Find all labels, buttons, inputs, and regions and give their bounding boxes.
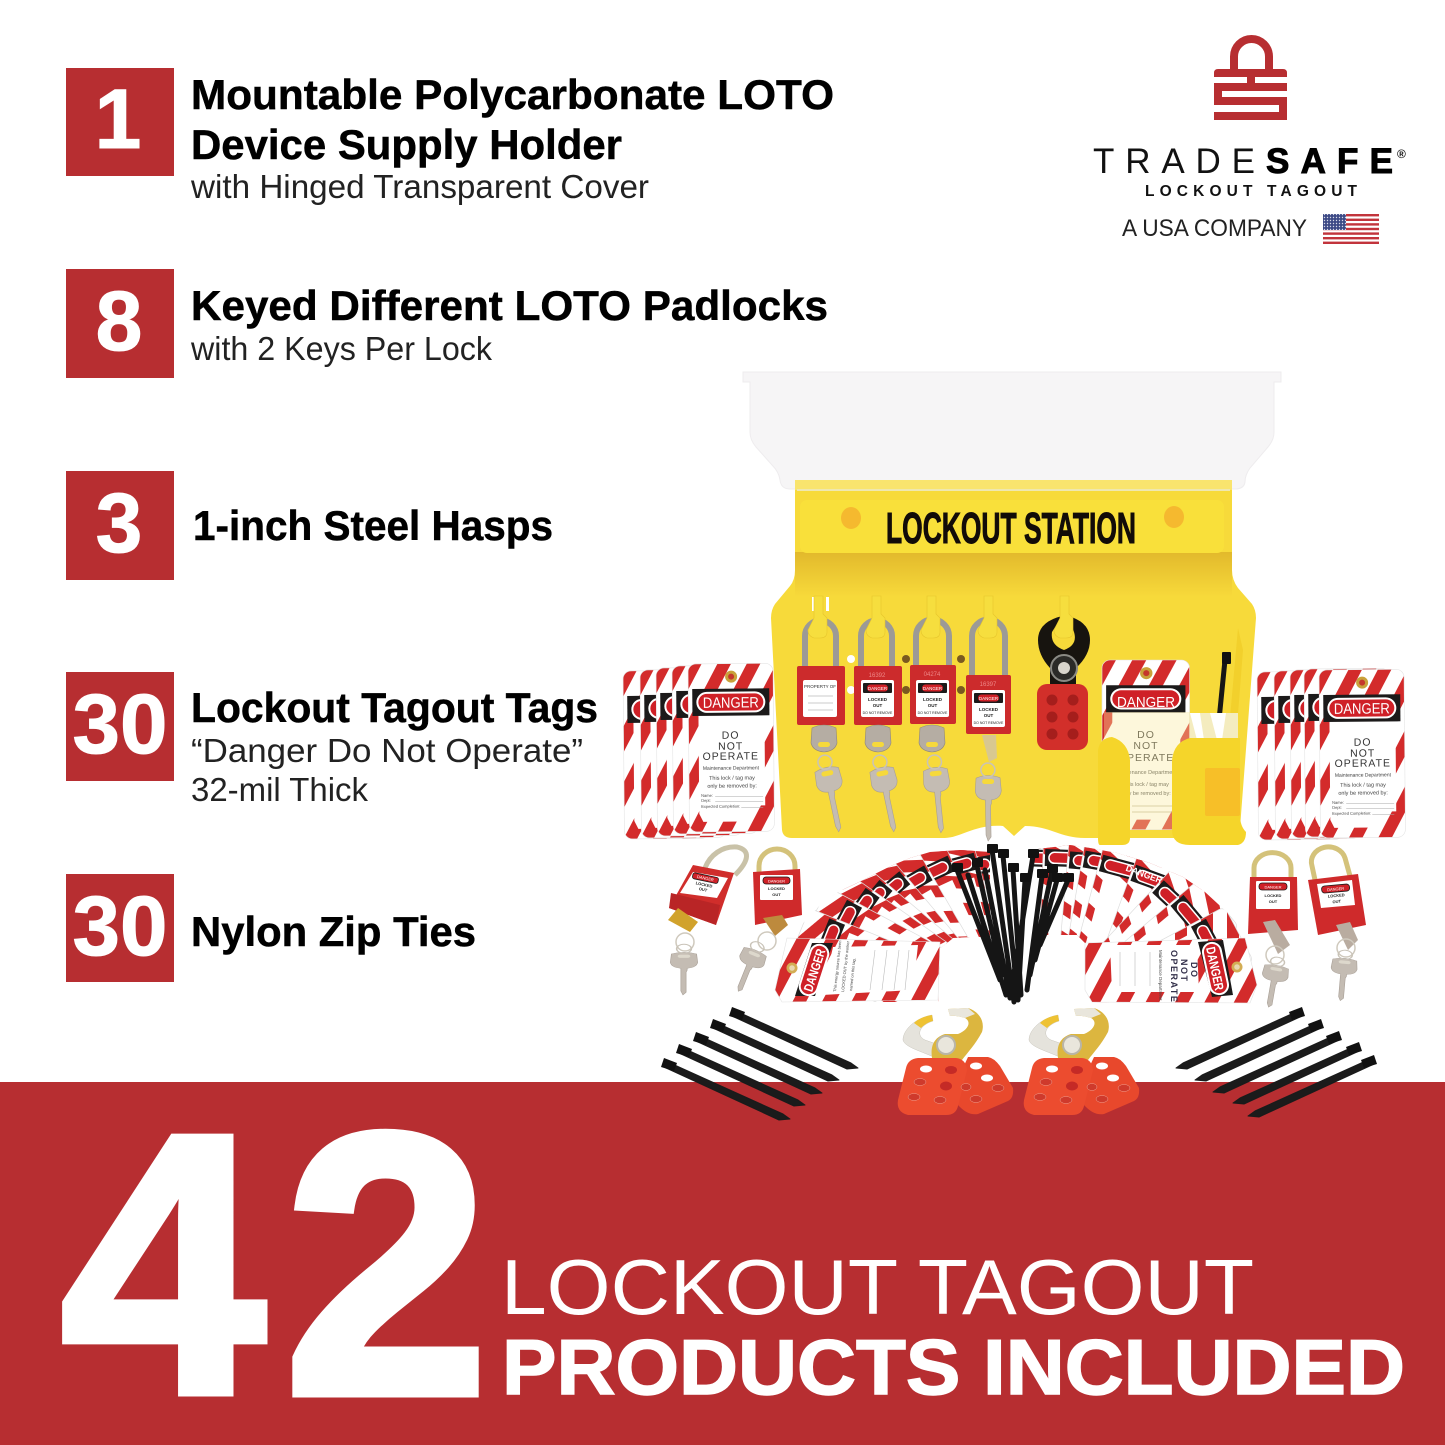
loose padlock left 2 <box>727 849 802 996</box>
front right tag: NOT <box>1179 959 1189 982</box>
icon: padlock logo <box>1214 39 1287 120</box>
nameplate: LOCKOUT STATION <box>886 504 1136 553</box>
loose padlock left 1: LOCKED <box>695 880 713 889</box>
main left tag: OPERATE <box>703 750 759 763</box>
banner line 1: LOCKOUT TAGOUT <box>501 1243 1254 1331</box>
main right tag: OPERATE <box>1335 757 1391 770</box>
transparent cover <box>743 372 1281 489</box>
padlock 4 with keys: 16397 <box>980 682 997 688</box>
right half of fan <box>1030 845 1258 1004</box>
feature 5: zip ties: 30 <box>72 879 168 973</box>
main right tag: Name: <box>1332 800 1344 805</box>
tag in pocket: DO <box>1137 729 1155 741</box>
loose padlock right 1: DANGER <box>1264 884 1282 890</box>
feature 4: tags: “Danger Do Not Operate” <box>191 732 583 769</box>
main left tag: Maintenance Department <box>703 765 760 772</box>
loose padlock left 1 <box>668 847 747 995</box>
padlock 2 with keys: DANGER <box>868 686 888 691</box>
product: lockout station board <box>743 372 1281 845</box>
logo: TradeSafe: ® <box>1397 147 1406 161</box>
logo: TradeSafe <box>1093 39 1406 244</box>
tag in pocket: NOT <box>1133 740 1159 752</box>
main left tag: Name: <box>701 793 713 798</box>
feature 2: padlocks: Keyed Different LOTO Padlocks <box>191 282 828 329</box>
feature 3: hasps: 1-inch Steel Hasps <box>193 502 553 549</box>
main right tag: DO <box>1354 737 1372 749</box>
front left tag: LOCKED OUT by the worker <box>840 940 850 992</box>
main left tag <box>688 663 774 832</box>
padlock 4 with keys: DO NOT REMOVE <box>974 721 1004 725</box>
big number 42 <box>60 1056 489 1445</box>
feature 1: holder <box>66 68 834 205</box>
icon: black zip tie on board <box>1217 652 1231 740</box>
loose padlock left 2: OUT <box>772 892 781 897</box>
loose padlock right 2: DANGER <box>1327 886 1344 892</box>
front right tag: Maintenance Department <box>1158 950 1163 1001</box>
banner line 2: PRODUCTS INCLUDED <box>502 1323 1405 1411</box>
padlock 2 with keys: LOCKED <box>868 697 888 702</box>
padlock 2 with keys: 16392 <box>869 673 886 679</box>
loose padlock left 2: DANGER <box>768 878 785 884</box>
hasp right <box>1024 1008 1139 1115</box>
left pocket <box>1098 737 1130 845</box>
feature 5: zip ties <box>66 874 476 982</box>
front left tag: named on this tag. <box>848 958 856 991</box>
loose padlock right 2 <box>1308 847 1366 1002</box>
bundle of black zip ties <box>952 844 1074 1002</box>
front right tag: OPERATE <box>1169 950 1179 1003</box>
padlock 1 with keys: PROPERTY OF <box>804 684 836 689</box>
padlock 2 with keys <box>854 596 907 834</box>
main right tag: Maintenance Department <box>1335 772 1392 779</box>
feature 1: holder: with Hinged Transparent Cover <box>190 168 649 205</box>
fan of danger tags <box>774 845 1258 1004</box>
padlock 3 with keys <box>910 596 956 834</box>
loose padlock right 2: LOCKED <box>1328 892 1345 899</box>
danger tags stack: right <box>1257 668 1405 840</box>
loose padlock right 1 <box>1248 853 1298 1010</box>
loose padlock left 2: LOCKED <box>768 886 785 891</box>
right pocket <box>1172 738 1246 845</box>
hasp on board <box>1037 596 1090 750</box>
main right tag: only be removed by: <box>1338 790 1388 797</box>
loose zip ties right <box>1176 1007 1377 1117</box>
feature 2: padlocks: 8 <box>96 274 142 368</box>
nameplate <box>800 500 1224 553</box>
padlock 4 with keys: OUT <box>984 713 994 718</box>
front right tag: DO <box>1189 962 1199 978</box>
padlock 4 with keys: LOCKED <box>979 707 999 712</box>
right half of fan: DANGER <box>1124 863 1164 886</box>
tag in pocket: This lock / tag may <box>1123 782 1169 788</box>
front right tag: DANGER <box>1203 946 1227 992</box>
feature 3: hasps <box>66 471 553 580</box>
logo: TradeSafe: TRADE <box>1093 142 1255 181</box>
loose padlock right 2: OUT <box>1332 899 1342 904</box>
padlock 4 with keys: DANGER <box>979 696 999 701</box>
main right tag: DANGER <box>1334 700 1390 718</box>
icon: US flag <box>1323 214 1379 244</box>
main left tag: Dept: <box>701 798 711 803</box>
loose padlock right 1: OUT <box>1269 899 1278 904</box>
bottom banner <box>0 1056 1445 1445</box>
feature 4: tags: 32-mil Thick <box>191 771 368 808</box>
main left tag: DANGER <box>703 694 759 712</box>
feature 3: hasps: 3 <box>96 476 142 570</box>
padlock 1 with keys <box>797 596 852 834</box>
main right tag: Expected Completion: <box>1332 811 1371 816</box>
front left tag: This energy source has been <box>832 940 842 992</box>
feature 4: tags: Lockout Tagout Tags <box>191 684 598 731</box>
logo: TradeSafe: A USA COMPANY <box>1122 215 1307 242</box>
feature 4: tags <box>66 672 598 808</box>
feature 4: tags: 30 <box>72 677 168 771</box>
feature 2: padlocks: with 2 Keys Per Lock <box>190 330 492 367</box>
tag in pocket: Maintenance Department <box>1115 770 1177 776</box>
main right tag: This lock / tag may <box>1340 782 1386 789</box>
main left tag: only be removed by: <box>707 783 757 790</box>
main left tag: This lock / tag may <box>709 775 755 782</box>
hasp left <box>898 1008 1013 1115</box>
padlock 3 with keys: OUT <box>928 703 938 708</box>
padlock 2 with keys: OUT <box>873 703 882 708</box>
tag in pocket: DANGER <box>1117 694 1175 711</box>
loose padlock left 1: OUT <box>698 886 708 893</box>
feature 1: holder: Device Supply Holder <box>191 121 622 168</box>
front right tag <box>1085 938 1257 1003</box>
feature 1: holder: 1 <box>95 72 141 166</box>
main right tag: NOT <box>1350 748 1375 760</box>
main right tag: Dept: <box>1332 805 1342 810</box>
main left tag: NOT <box>718 741 743 753</box>
padlock 4 with keys <box>966 596 1011 841</box>
feature 2: padlocks <box>66 269 828 378</box>
danger tags stack: left <box>623 663 774 839</box>
yellow board <box>771 480 1256 838</box>
loose padlock right 1: LOCKED <box>1265 893 1282 898</box>
logo: TradeSafe: SAFE <box>1266 142 1393 181</box>
padlock 2 with keys: DO NOT REMOVE <box>863 711 893 715</box>
tag in pocket <box>1102 660 1190 830</box>
feature 5: zip ties: Nylon Zip Ties <box>191 908 476 955</box>
left half of fan <box>774 850 990 1002</box>
feature 1: holder: Mountable Polycarbonate LOTO <box>191 71 834 118</box>
main left tag: DO <box>722 730 740 742</box>
padlock 3 with keys: DANGER <box>923 686 943 691</box>
padlock 3 with keys: DO NOT REMOVE <box>918 711 948 715</box>
tag in pocket: OPERATE <box>1118 752 1174 764</box>
main left tag: Expected Completion: <box>701 804 740 809</box>
logo: TradeSafe: LOCKOUT TAGOUT <box>1145 183 1358 200</box>
tag in pocket: only be removed by: <box>1121 791 1171 797</box>
loose padlock left 1: DANGER <box>697 874 714 882</box>
padlock 3 with keys: LOCKED <box>923 697 943 702</box>
padlock 3 with keys: 04274 <box>924 672 941 678</box>
loose zip ties left <box>661 1007 858 1120</box>
front left tag: DANGER <box>801 946 829 993</box>
front left tag <box>775 938 940 1002</box>
main right tag <box>1319 669 1405 838</box>
